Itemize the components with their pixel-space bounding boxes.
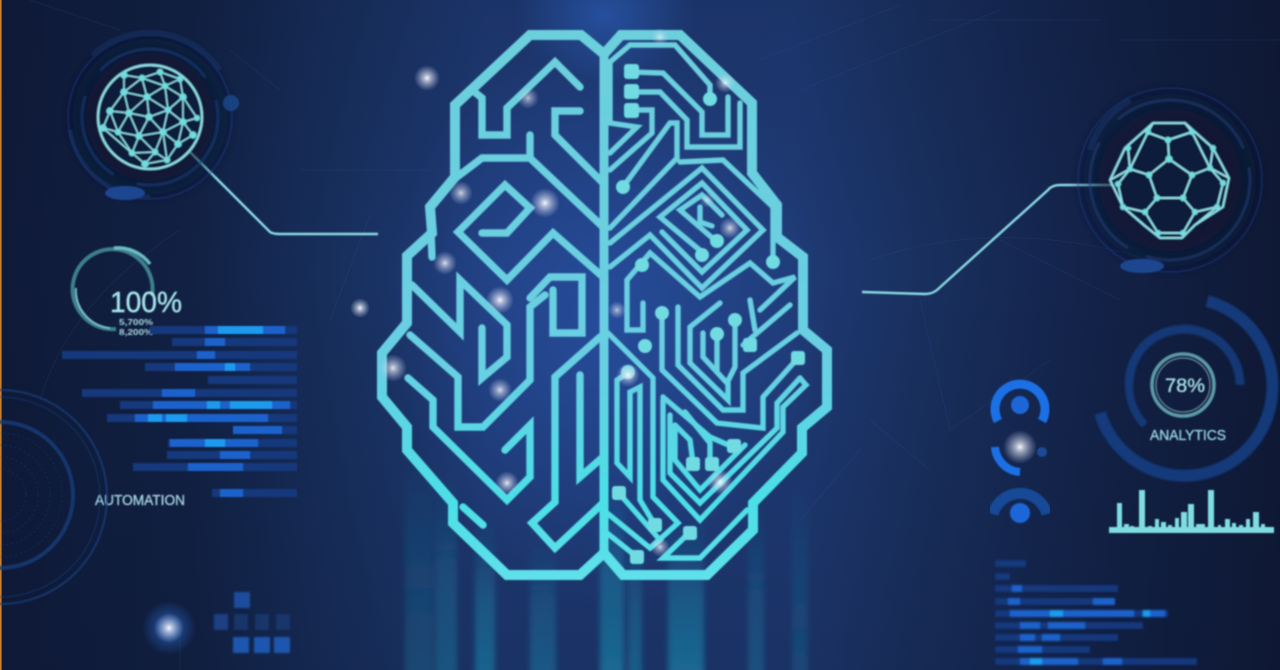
central divider	[600, 54, 608, 553]
spark on dial	[1003, 430, 1037, 464]
78% value: 78%	[1165, 376, 1205, 397]
gauge small labels: 5,700%	[119, 317, 154, 327]
right hemisphere traces	[607, 45, 806, 558]
100% gauge: 8,200%	[119, 327, 154, 337]
brain circuit illustration	[382, 35, 827, 575]
left data bars	[62, 326, 297, 497]
dial icon middle	[995, 447, 1047, 472]
left hemisphere traces	[408, 62, 603, 548]
buckyball wireframe	[1110, 123, 1229, 238]
inner ring	[1152, 354, 1214, 416]
square grid, bottom left	[214, 592, 290, 653]
right hemisphere outline	[604, 35, 827, 575]
dial icon top	[995, 384, 1045, 421]
outer arcs	[1100, 301, 1272, 476]
concentric rings, lower left	[0, 390, 107, 604]
left connector line	[190, 152, 378, 234]
100% gauge	[73, 248, 182, 337]
right data bars	[995, 560, 1197, 665]
analytics gauge	[1100, 301, 1272, 476]
left hemisphere outline	[382, 35, 604, 575]
left geodesic sphere	[60, 27, 240, 207]
glowing target, bottom left	[142, 601, 196, 655]
rings around right sphere	[1070, 80, 1270, 280]
light streaks below brain	[405, 450, 808, 670]
mini bar chart	[1109, 490, 1274, 533]
AUTOMATION label: AUTOMATION	[95, 493, 185, 509]
glowing sparks	[350, 28, 741, 557]
100% value: 100%	[110, 287, 182, 319]
right buckyball sphere	[1070, 80, 1270, 280]
sphere wireframe	[98, 65, 202, 169]
rings around left sphere	[60, 27, 240, 207]
blue dial icons	[993, 384, 1047, 523]
right connector line	[862, 185, 1112, 294]
dial icon bottom	[993, 493, 1047, 523]
ANALYTICS label: ANALYTICS	[1150, 428, 1226, 444]
circuit pads	[612, 64, 805, 564]
